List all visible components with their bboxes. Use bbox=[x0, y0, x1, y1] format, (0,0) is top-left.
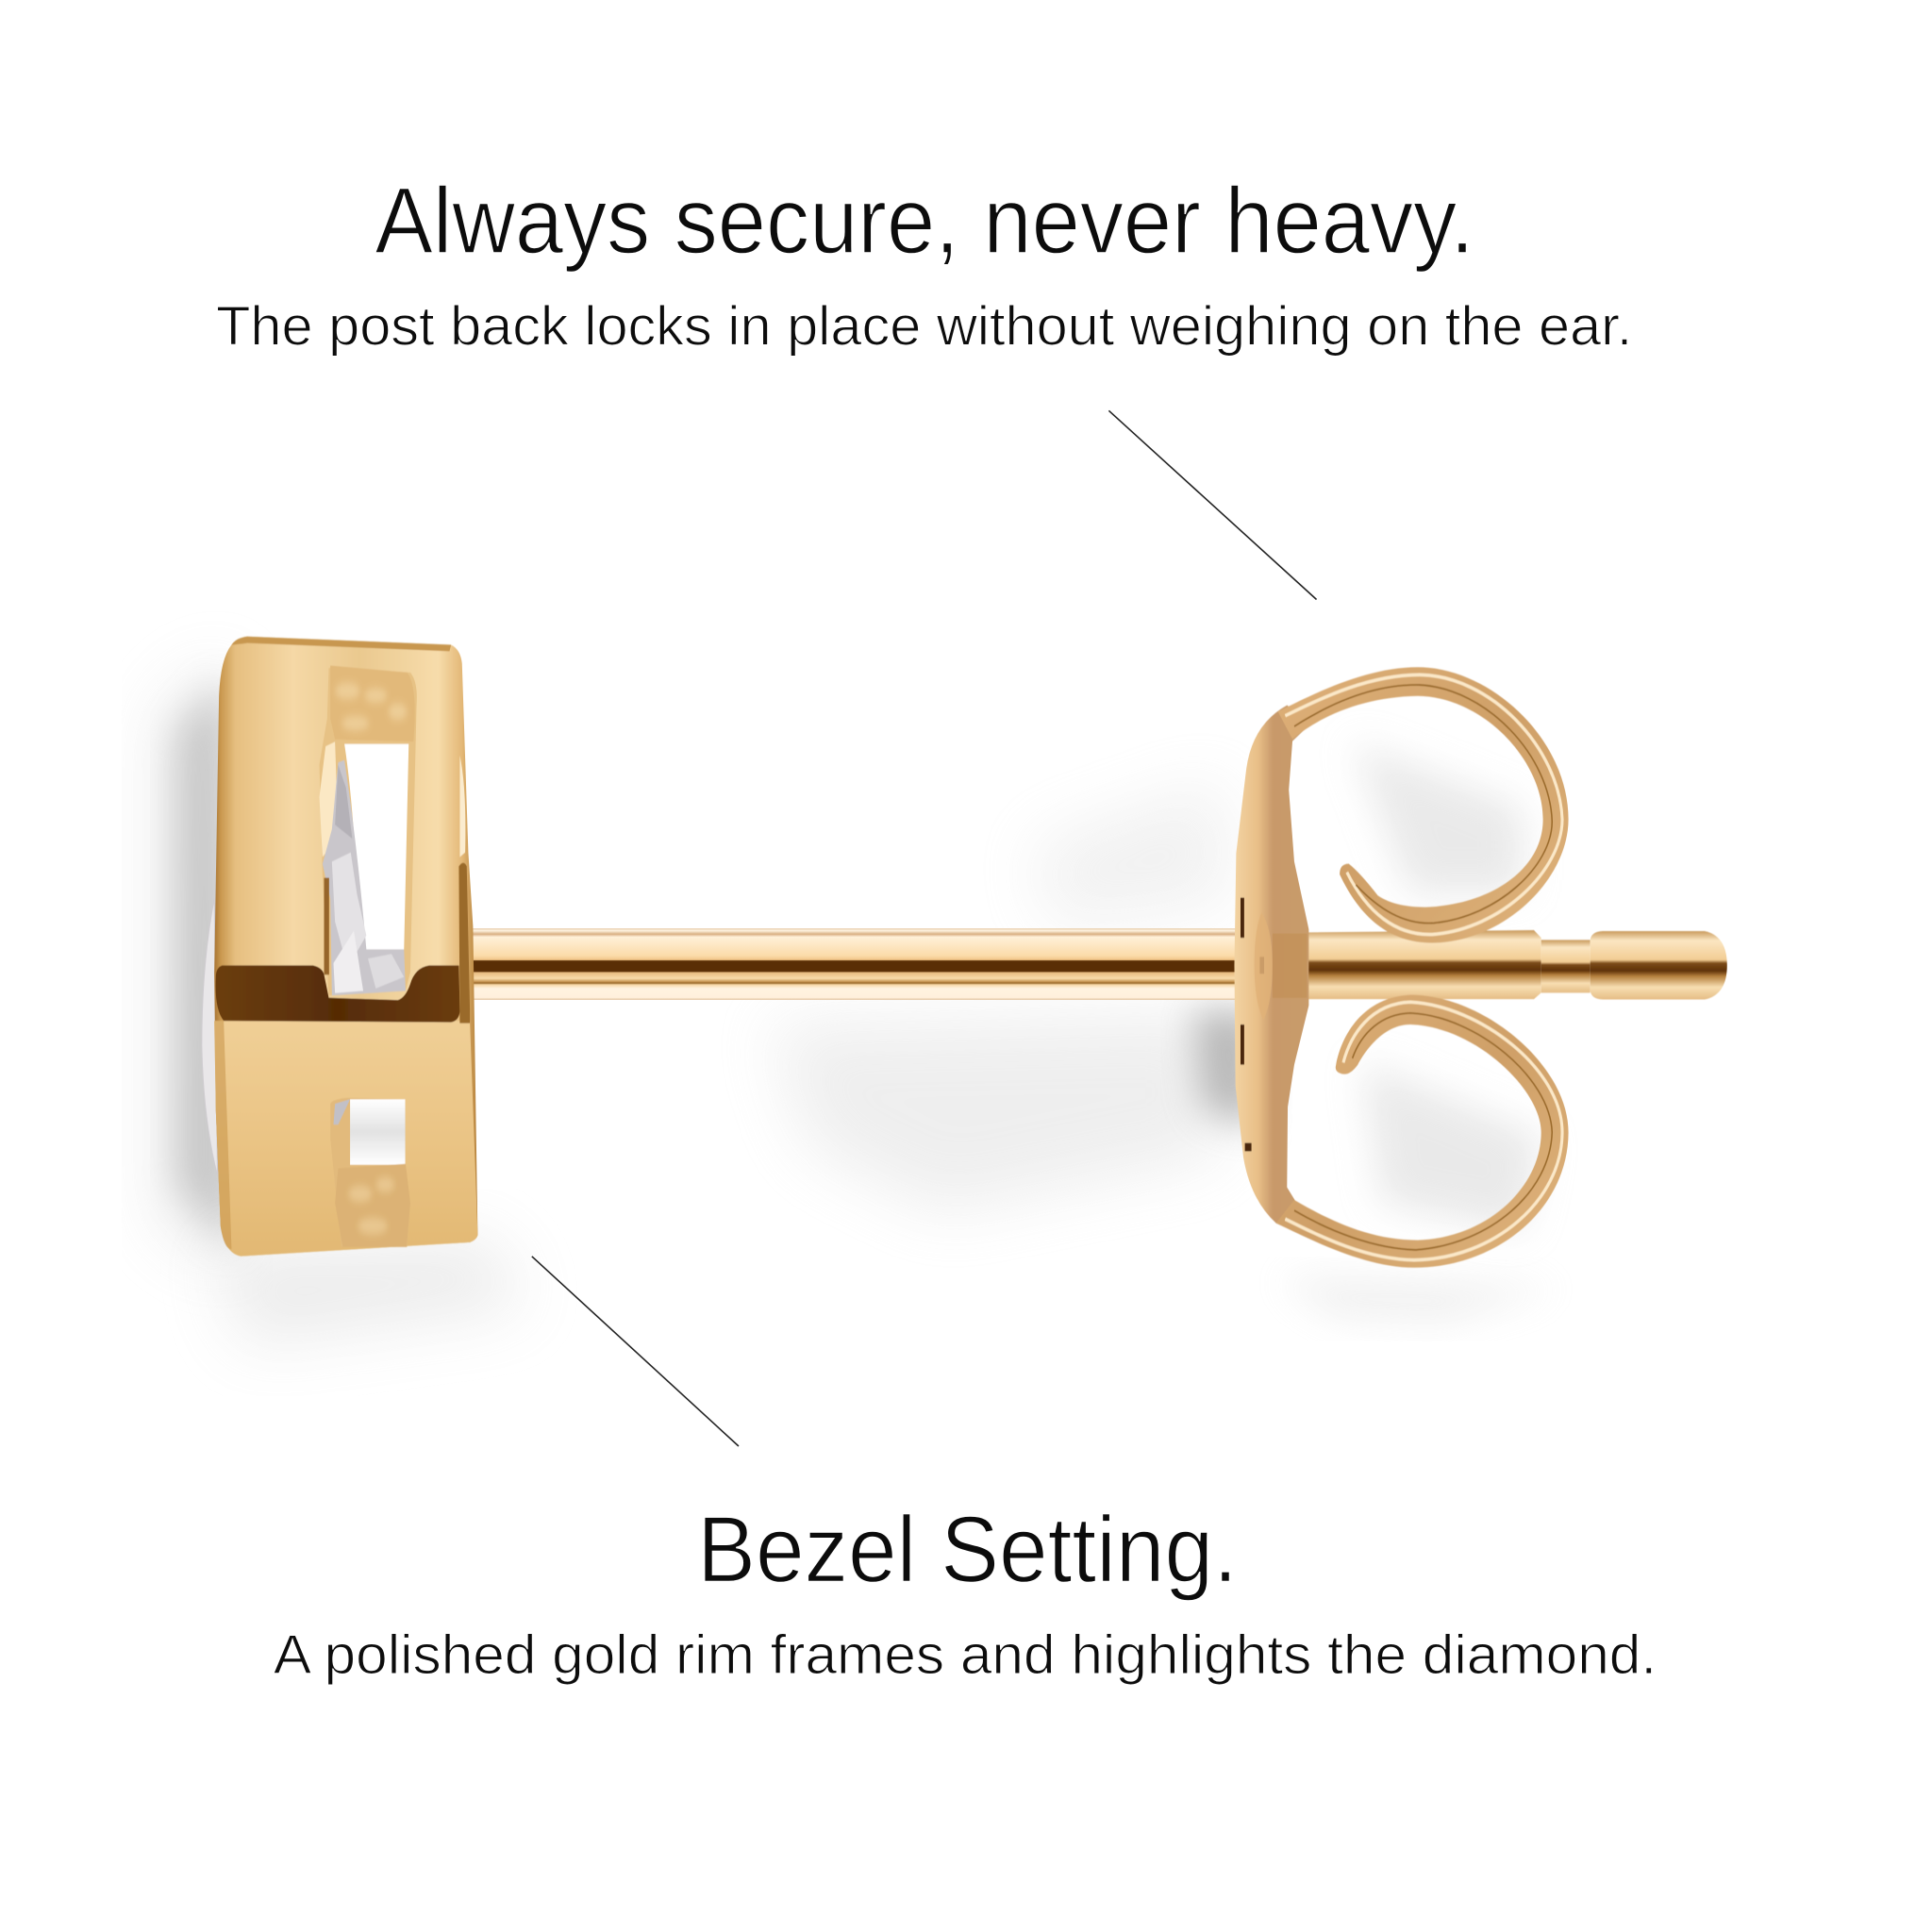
slot edge shadow bbox=[325, 878, 329, 974]
leader line to post back bbox=[1108, 410, 1317, 600]
subtitle: post back: The post back locks in place without weighing on the ear. bbox=[216, 296, 1632, 358]
bottom loop dark line bbox=[1294, 1013, 1552, 1250]
back plate bbox=[1234, 706, 1312, 1232]
dark reflection band bbox=[216, 965, 459, 1023]
tube barrel bbox=[1273, 930, 1541, 999]
polished lower surface bbox=[214, 1021, 477, 1257]
subheading: gold rim: A polished gold rim frames and highlights the diamond. bbox=[274, 1624, 1657, 1686]
collar bbox=[1255, 912, 1273, 1021]
lower texture bbox=[335, 1164, 410, 1247]
upper texture flecks bbox=[335, 683, 408, 730]
top rim highlight bbox=[231, 637, 451, 651]
bezel body bbox=[214, 637, 477, 1257]
upper slot shading bbox=[320, 668, 417, 995]
heading: bezel setting: Bezel Setting. bbox=[697, 1497, 1238, 1602]
earring butterfly back bbox=[1234, 667, 1727, 1268]
bottom loop highlights bbox=[1285, 1002, 1562, 1260]
right edge highlight bbox=[459, 756, 465, 858]
earring post shaft bbox=[470, 928, 1250, 1000]
neck bbox=[1541, 940, 1591, 992]
diamond sliver at left bbox=[202, 899, 217, 1175]
upper texture bbox=[330, 666, 415, 741]
upper window opening bbox=[344, 744, 408, 958]
lower window surround bbox=[330, 1098, 410, 1247]
lower texture flecks bbox=[348, 1177, 394, 1235]
earring bezel setting bbox=[202, 637, 477, 1257]
top spring loop bbox=[1278, 667, 1569, 942]
leader line to bezel bbox=[532, 1257, 739, 1446]
collar shaft bbox=[1273, 934, 1307, 998]
top loop dark line bbox=[1294, 685, 1552, 924]
plate slits bbox=[1241, 898, 1264, 1151]
soft drop shadows bbox=[159, 658, 1560, 1343]
lower window diamond bbox=[333, 1099, 350, 1124]
upper highlight bbox=[320, 741, 337, 858]
post tip bbox=[1591, 931, 1727, 1000]
visible diamond facets bbox=[323, 760, 406, 995]
bottom spring loop bbox=[1276, 995, 1569, 1268]
lower left edge shading bbox=[214, 1021, 231, 1249]
title: secure: Always secure, never heavy. bbox=[375, 169, 1474, 274]
lower window opening bbox=[350, 1099, 406, 1165]
top loop highlights bbox=[1285, 675, 1562, 935]
dark right edge bbox=[458, 863, 470, 1024]
